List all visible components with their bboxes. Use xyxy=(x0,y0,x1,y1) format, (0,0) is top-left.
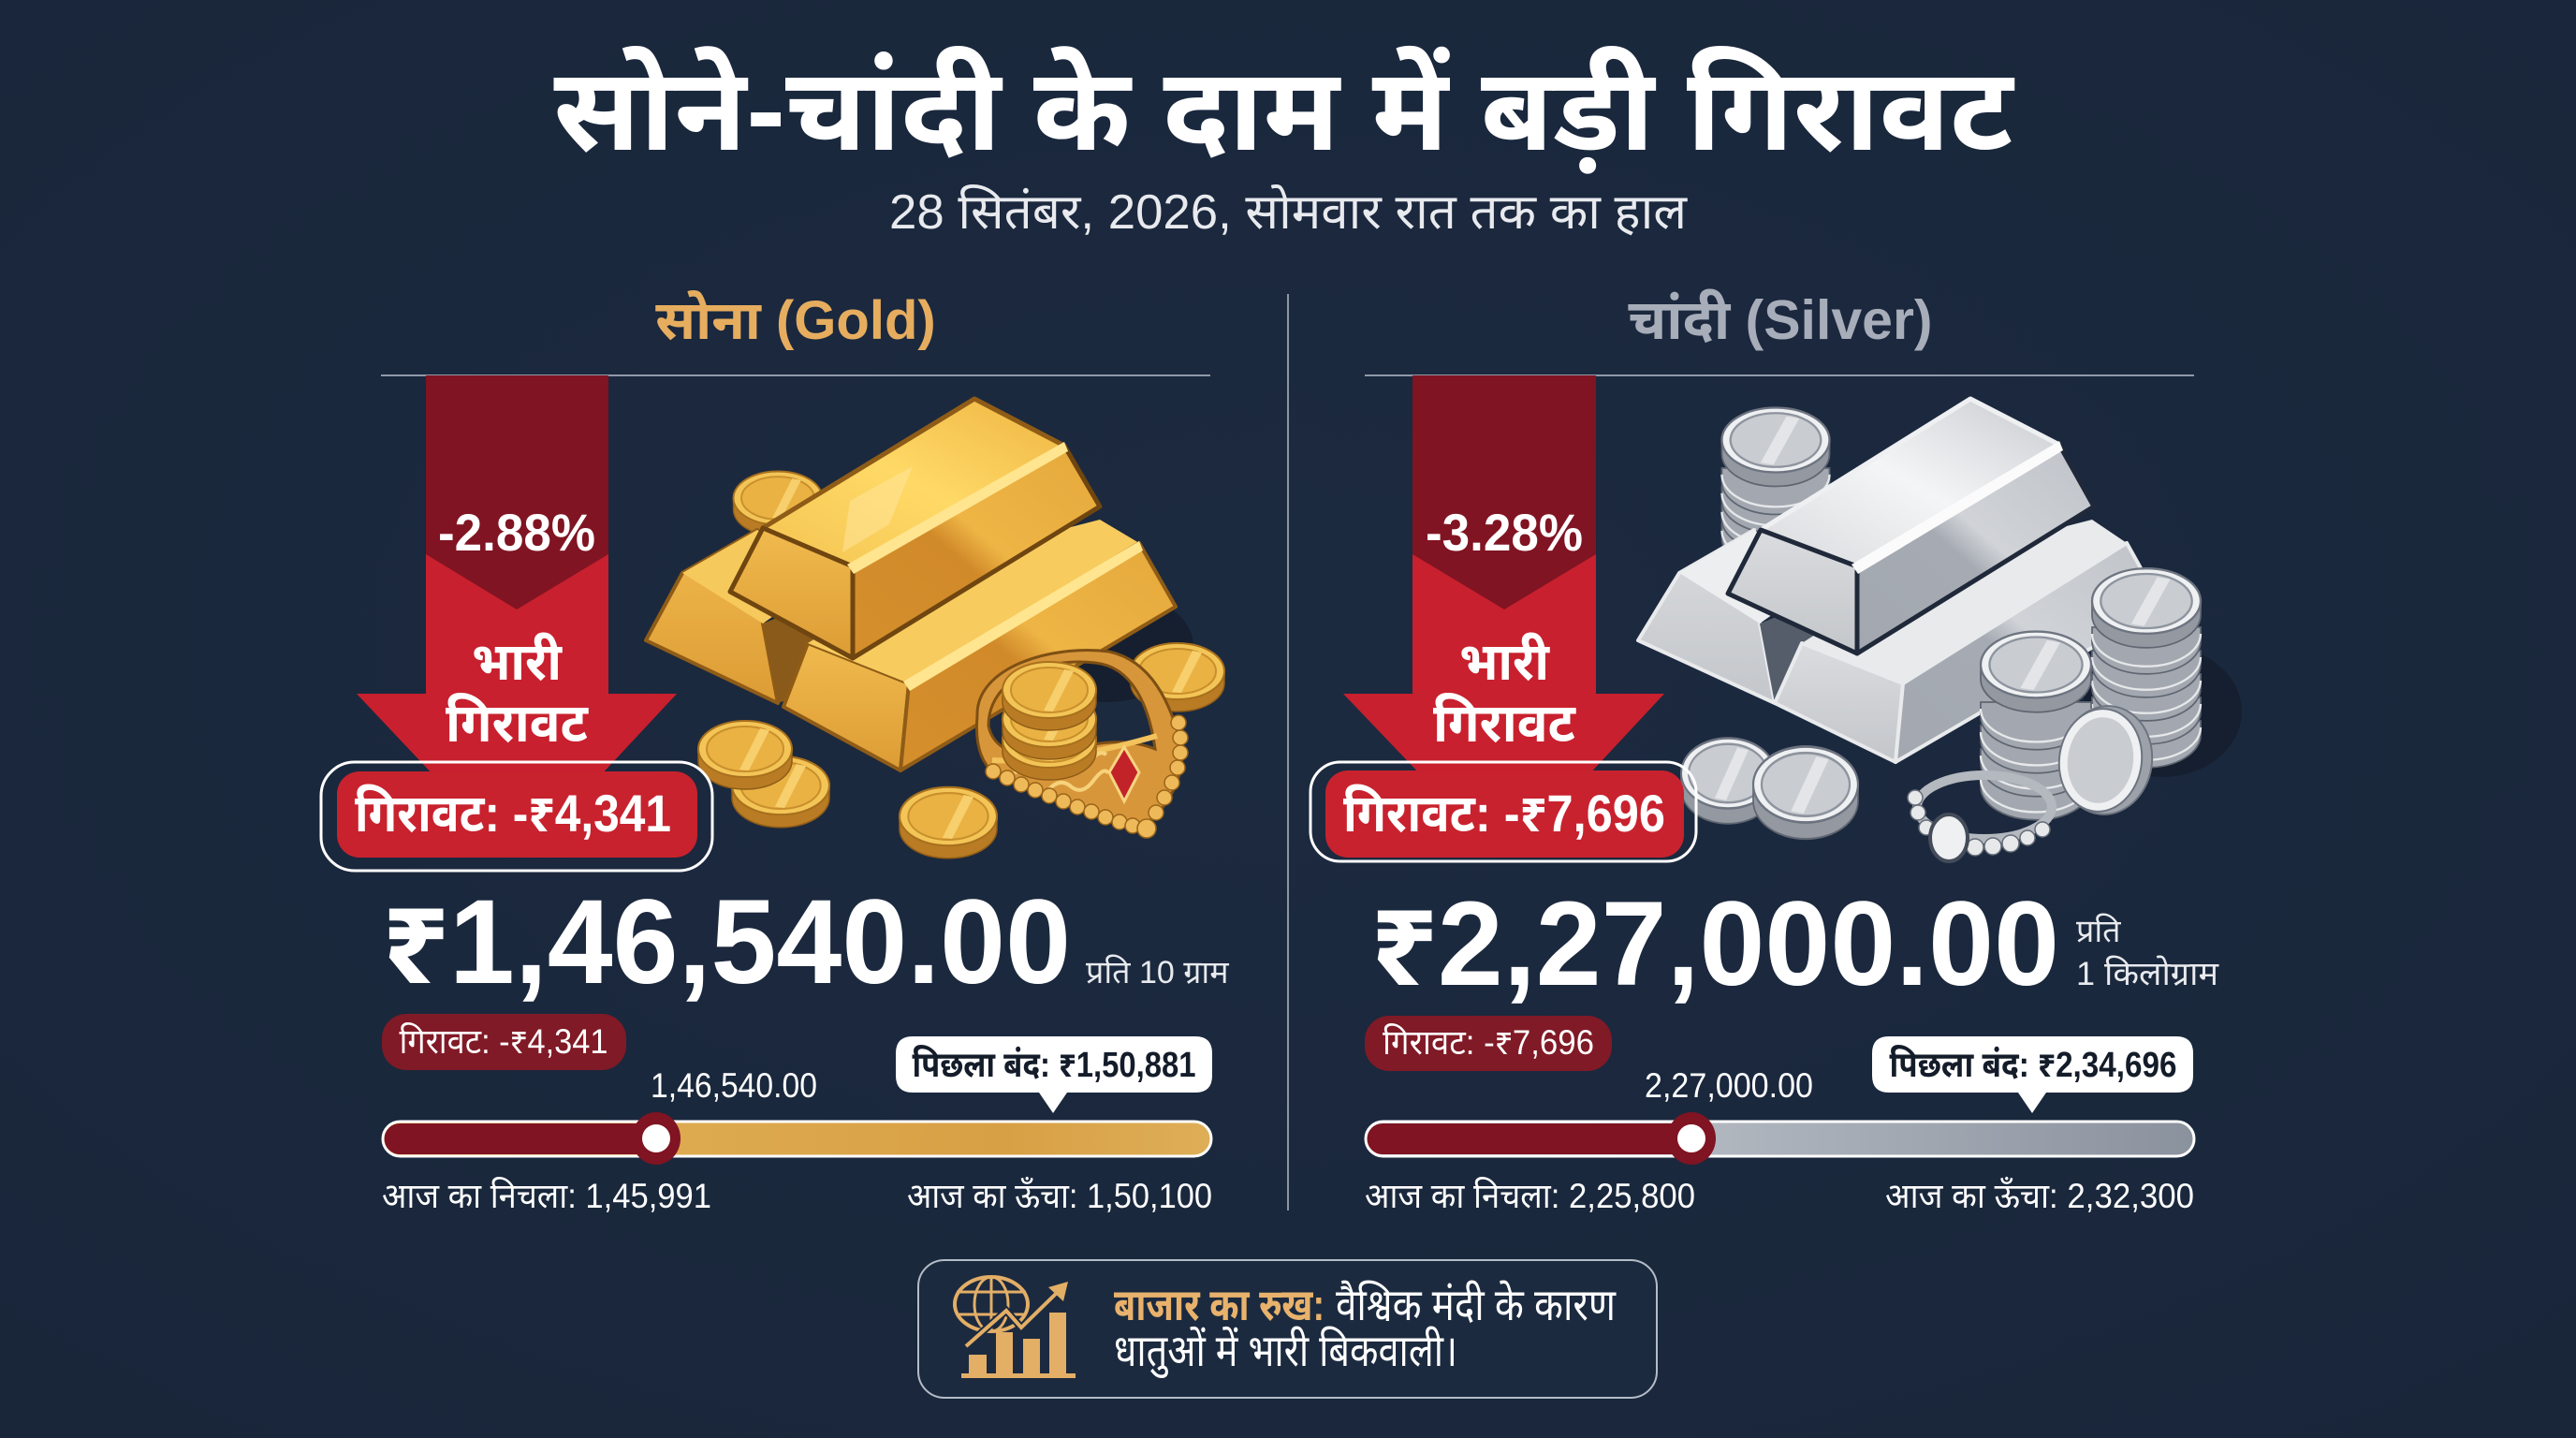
callout: previous close xyxy=(1872,1036,2193,1113)
arrow: heavy fall xyxy=(357,375,677,777)
arrow: heavy fall: भारी xyxy=(1459,632,1550,691)
range bar: silver xyxy=(1365,1036,2194,1215)
arrow: heavy fall: गिरावट xyxy=(446,693,590,754)
arrow: heavy fall: -3.28% xyxy=(1426,503,1583,562)
subtitle: 28 सितंबर, 2026, सोमवार रात तक का हाल xyxy=(889,185,1688,240)
arrow: heavy fall: -2.88% xyxy=(438,503,595,562)
arrow: heavy fall: गिरावट xyxy=(1433,693,1577,754)
price: silver: प्रति xyxy=(2076,914,2121,949)
badge: drop amount xyxy=(321,762,712,871)
text: market trend: बाजार का रुख: xyxy=(1114,1280,1325,1329)
callout: previous close: पिछला बंद: ₹2,34,696 xyxy=(1889,1044,2177,1085)
text: market trend: वैश्विक मंदी के कारण xyxy=(1336,1280,1617,1329)
illustration: gold bars, coins and ring xyxy=(646,399,1224,858)
range bar: gold: आज का निचला: 1,45,991 xyxy=(382,1177,711,1215)
range bar: gold xyxy=(382,1036,1212,1215)
panel: silver xyxy=(1310,289,2242,1215)
range bar: gold: 1,46,540.00 xyxy=(651,1066,817,1105)
pill: drop amount: गिरावट: -₹4,341 xyxy=(399,1022,608,1061)
pill: drop amount xyxy=(1365,1016,1612,1071)
badge: drop amount: गिरावट: -₹7,696 xyxy=(1343,784,1665,843)
price: gold: ₹1,46,540.00 xyxy=(382,875,1071,1009)
price: silver: 1 किलोग्राम xyxy=(2076,955,2219,992)
range bar: silver: 2,27,000.00 xyxy=(1645,1066,1813,1105)
price: silver: ₹2,27,000.00 xyxy=(1370,877,2059,1011)
illustration: silver bars, coins and ring xyxy=(1638,399,2242,861)
title: सोने-चांदी के दाम में बड़ी गिरावट xyxy=(554,45,2015,175)
heading: gold: सोना (Gold) xyxy=(655,290,936,351)
text: market trend xyxy=(1114,1280,1617,1379)
panel: gold xyxy=(321,290,1229,1215)
badge: drop amount xyxy=(1310,762,1696,861)
pill: drop amount: गिरावट: -₹7,696 xyxy=(1383,1023,1594,1062)
pill: drop amount xyxy=(382,1014,626,1070)
icon: globe and rising chart xyxy=(955,1277,1076,1378)
arrow: heavy fall: भारी xyxy=(472,632,563,691)
badge: drop amount: गिरावट: -₹4,341 xyxy=(355,784,671,843)
range bar: silver: आज का ऊँचा: 2,32,300 xyxy=(1885,1176,2194,1215)
range bar: silver: आज का निचला: 2,25,800 xyxy=(1365,1177,1695,1215)
callout: previous close: पिछला बंद: ₹1,50,881 xyxy=(912,1044,1196,1085)
range bar: gold: आज का ऊँचा: 1,50,100 xyxy=(907,1176,1212,1215)
text: market trend: धातुओं में भारी बिकवाली। xyxy=(1114,1326,1457,1379)
price: gold: प्रति 10 ग्राम xyxy=(1086,955,1229,990)
arrow: heavy fall xyxy=(1343,375,1664,777)
heading: silver: चांदी (Silver) xyxy=(1628,289,1933,351)
callout: previous close xyxy=(896,1036,1212,1113)
panel: market trend xyxy=(918,1260,1657,1398)
